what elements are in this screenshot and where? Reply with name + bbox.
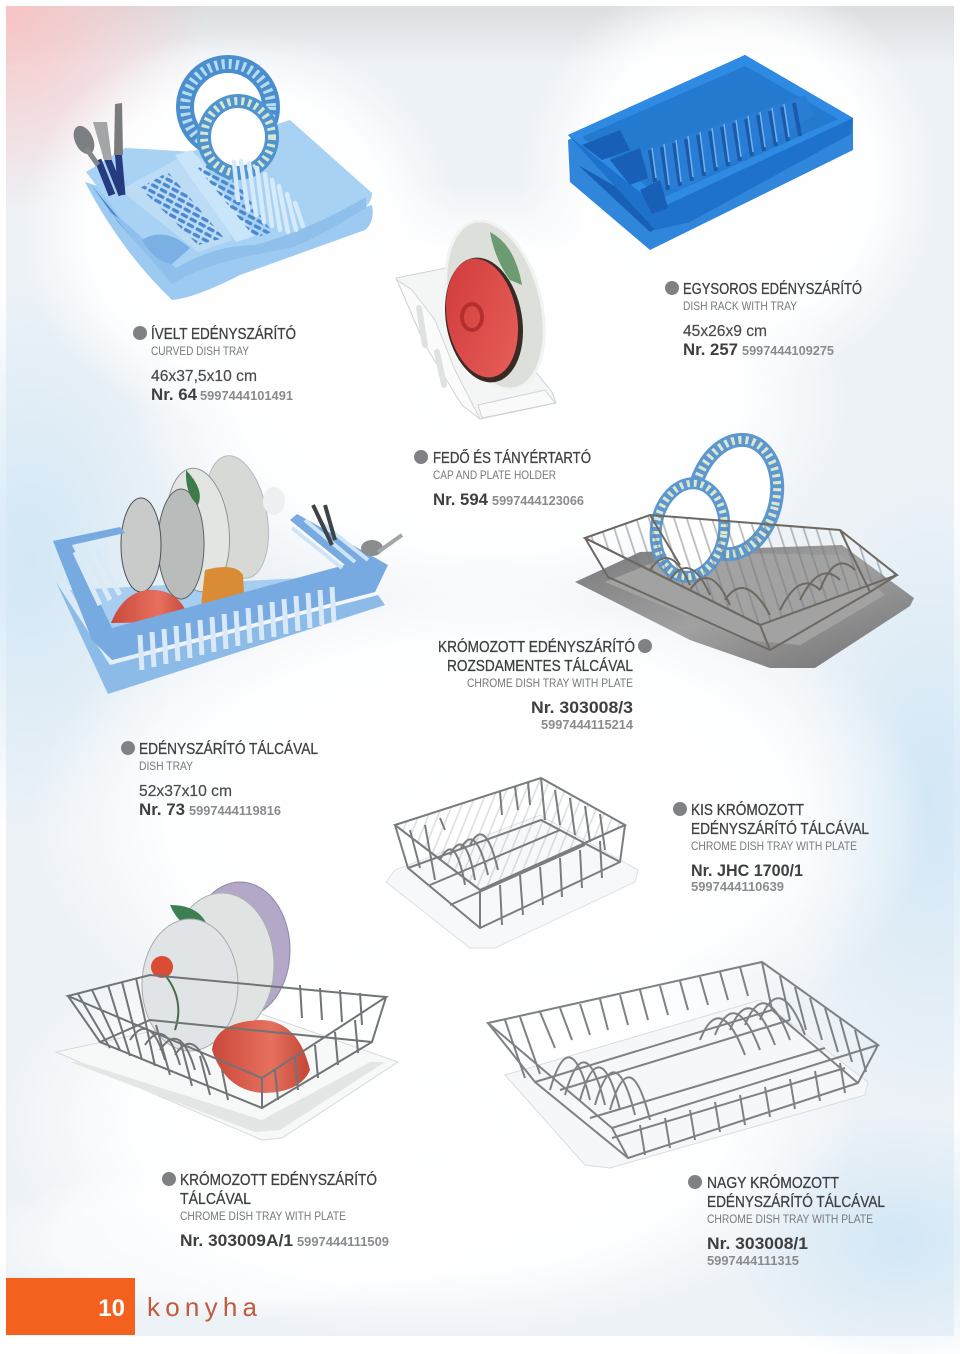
bullet + label: cap and plate holder: FEDŐ ÉS TÁNYÉRTARTÓ: [433, 448, 591, 467]
product photo: single row blue dish rack: [568, 55, 853, 250]
bullet + label: single row rack: EGYSOROS EDÉNYSZÁRÍTÓ: [683, 279, 862, 298]
product photo: small chrome rack with white tray: [386, 778, 638, 948]
plate rack ribs: [234, 161, 303, 232]
cutlery: [98, 150, 122, 195]
bullet + label: curved dish tray: ÍVELT EDÉNYSZÁRÍTÓ: [151, 324, 296, 343]
bullet + label: cap and plate holder: [414, 448, 591, 509]
bullet + label: large chrome rack: Nr. 303008/1: [707, 1234, 808, 1253]
bullet + label: chrome rack stainless tray: ROZSDAMENTES TÁLCÁVAL: [447, 656, 633, 675]
icon: front plate: [204, 101, 272, 173]
bullet + label: dish tray: EDÉNYSZÁRÍTÓ TÁLCÁVAL: [139, 739, 318, 758]
bullet + label: large chrome rack: 5997444111315: [707, 1254, 799, 1268]
bullet + label: large chrome rack: NAGY KRÓMOZOTT: [707, 1173, 839, 1192]
product photo: blue dish tray with plates: [53, 451, 402, 694]
bullet + label: small chrome rack: KIS KRÓMOZOTT: [691, 800, 804, 819]
page number tab: [6, 1278, 135, 1335]
bullet + label: large chrome rack: [688, 1173, 885, 1268]
bullet + label: chrome rack stainless tray: CHROME DISH TRAY WITH PLATE: [467, 676, 633, 690]
bullet + label: curved dish tray: Nr. 64: [151, 385, 198, 404]
product photo: chrome rack with plates and bowl: [56, 882, 398, 1140]
icon: back plate: [185, 64, 271, 150]
bullet + label: chrome rack stainless tray: [438, 637, 652, 732]
bullet + label: curved dish tray: CURVED DISH TRAY: [151, 344, 249, 358]
bullet + label: large chrome rack: EDÉNYSZÁRÍTÓ TÁLCÁVAL: [707, 1192, 885, 1211]
bullet + label: cap and plate holder: CAP AND PLATE HOLDER: [433, 468, 556, 482]
bullet + label: chrome rack stainless tray: Nr. 303008/3: [531, 698, 633, 717]
bullet + label: chrome rack stainless tray: KRÓMOZOTT EDÉNYSZÁRÍTÓ: [438, 637, 635, 656]
product photo: cap and plate holder: [396, 210, 560, 419]
bullet + label: chrome dish rack: CHROME DISH TRAY WITH PLATE: [180, 1209, 346, 1223]
bullet + label: single row rack: DISH RACK WITH TRAY: [683, 299, 797, 313]
bullet + label: chrome dish rack: [162, 1170, 389, 1250]
bullet + label: single row rack: [665, 279, 862, 359]
bullet + label: chrome dish rack: KRÓMOZOTT EDÉNYSZÁRÍTÓ: [180, 1170, 377, 1189]
bullet + label: small chrome rack: CHROME DISH TRAY WITH PLATE: [691, 839, 857, 853]
bullet + label: dish tray: [121, 739, 318, 819]
section name: konyha: [147, 1292, 258, 1322]
bullet + label: chrome dish rack: TÁLCÁVAL: [180, 1189, 251, 1208]
bullet + label: cap and plate holder: 5997444123066: [492, 494, 584, 508]
product photo: large chrome rack with white tray: [488, 962, 878, 1168]
bullet + label: chrome rack stainless tray: 5997444115214: [541, 718, 633, 732]
bullet + label: chrome dish rack: 5997444111509: [297, 1235, 389, 1249]
product photo: curved dish tray with plates and cutlery: [70, 64, 373, 300]
bullet + label: single row rack: 45x26x9 cm: [683, 323, 767, 340]
bullet + label: chrome dish rack: Nr. 303009A/1: [180, 1231, 293, 1250]
bullet + label: single row rack: 5997444109275: [742, 344, 834, 358]
bullet + label: curved dish tray: [133, 324, 296, 404]
bullet + label: dish tray: 5997444119816: [189, 804, 281, 818]
bullet + label: small chrome rack: Nr. JHC 1700/1: [691, 861, 803, 880]
bullet + label: small chrome rack: EDÉNYSZÁRÍTÓ TÁLCÁVAL: [691, 819, 869, 838]
page number tab: 10: [98, 1295, 125, 1322]
bullet + label: small chrome rack: 5997444110639: [691, 880, 784, 894]
product photo: chrome rack with steel tray and plates: [575, 431, 914, 668]
bullet + label: dish tray: DISH TRAY: [139, 759, 193, 773]
bullet + label: small chrome rack: [673, 800, 869, 894]
bullet + label: dish tray: 52x37x10 cm: [139, 783, 232, 800]
bullet + label: curved dish tray: 5997444101491: [200, 389, 293, 403]
bullet + label: dish tray: Nr. 73: [139, 800, 185, 819]
bullet + label: curved dish tray: 46x37,5x10 cm: [151, 368, 257, 385]
bullet + label: large chrome rack: CHROME DISH TRAY WITH PLATE: [707, 1212, 873, 1226]
bullet + label: single row rack: Nr. 257: [683, 340, 738, 359]
wire frame: [585, 515, 897, 650]
bullet + label: cap and plate holder: Nr. 594: [433, 490, 489, 509]
